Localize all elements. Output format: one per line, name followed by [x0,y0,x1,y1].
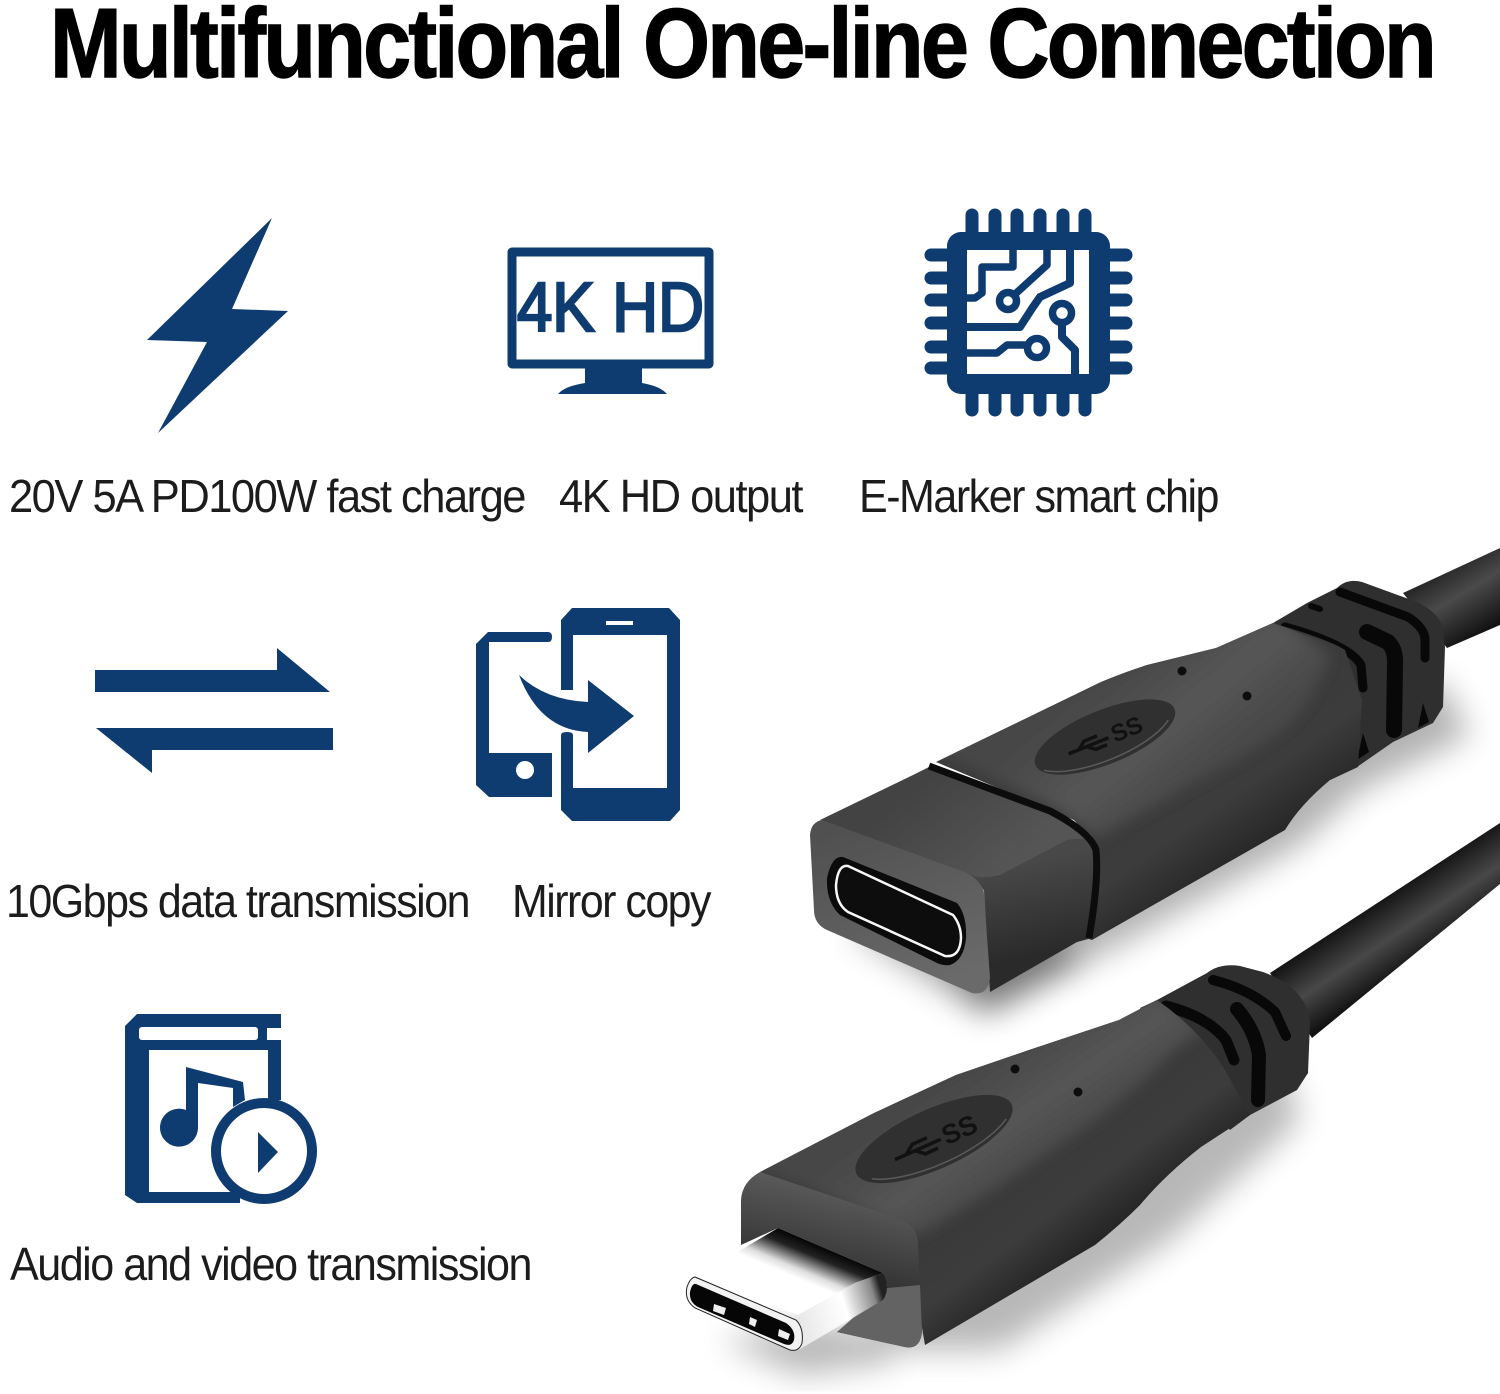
label: E-Marker chip: E-Marker smart chip [859,470,1218,522]
label: audio and video transmission: Audio and video transmission [10,1238,531,1290]
cable: male end [1270,823,1500,1038]
icon: mirror copy phones [476,608,680,821]
logo oval [1025,684,1185,790]
body [760,1000,1250,1345]
label: fast charge: 20V 5A PD100W fast charge [9,470,525,522]
icon: bidirectional transfer arrows [95,648,333,773]
plug front rim [686,1277,802,1350]
body [936,623,1362,940]
icon: audio and video book [125,1014,312,1203]
seam [929,766,1097,938]
icon: lightning bolt [147,218,288,433]
icon: 4K HD monitor [512,252,709,394]
label: 4K HD output: 4K HD output [559,470,804,522]
plug shell top [695,1228,883,1315]
icon: 4K HD monitor: 4K HD [517,268,704,346]
cable: female end [1403,548,1500,648]
logo oval: SS [1107,711,1147,748]
cap top [820,765,1092,882]
dots [1010,1064,1020,1074]
strain relief [1140,965,1310,1130]
connector face [741,1172,922,1347]
product: male USB-C connector [686,823,1500,1375]
logo oval [844,1077,1024,1201]
product: female USB-C connector [810,548,1500,1015]
port face [810,820,990,993]
USB-C port opening [827,857,966,965]
dots [1178,666,1186,676]
plug shell side [790,1273,887,1350]
cap side panel [967,839,1097,992]
plug opening [690,1284,794,1345]
label: mirror copy: Mirror copy [512,875,711,927]
logo oval: SS [937,1109,982,1151]
strain relief [1240,581,1445,780]
label: data transmission: 10Gbps data transmission [6,875,469,927]
icon: E-Marker chip [931,215,1126,410]
